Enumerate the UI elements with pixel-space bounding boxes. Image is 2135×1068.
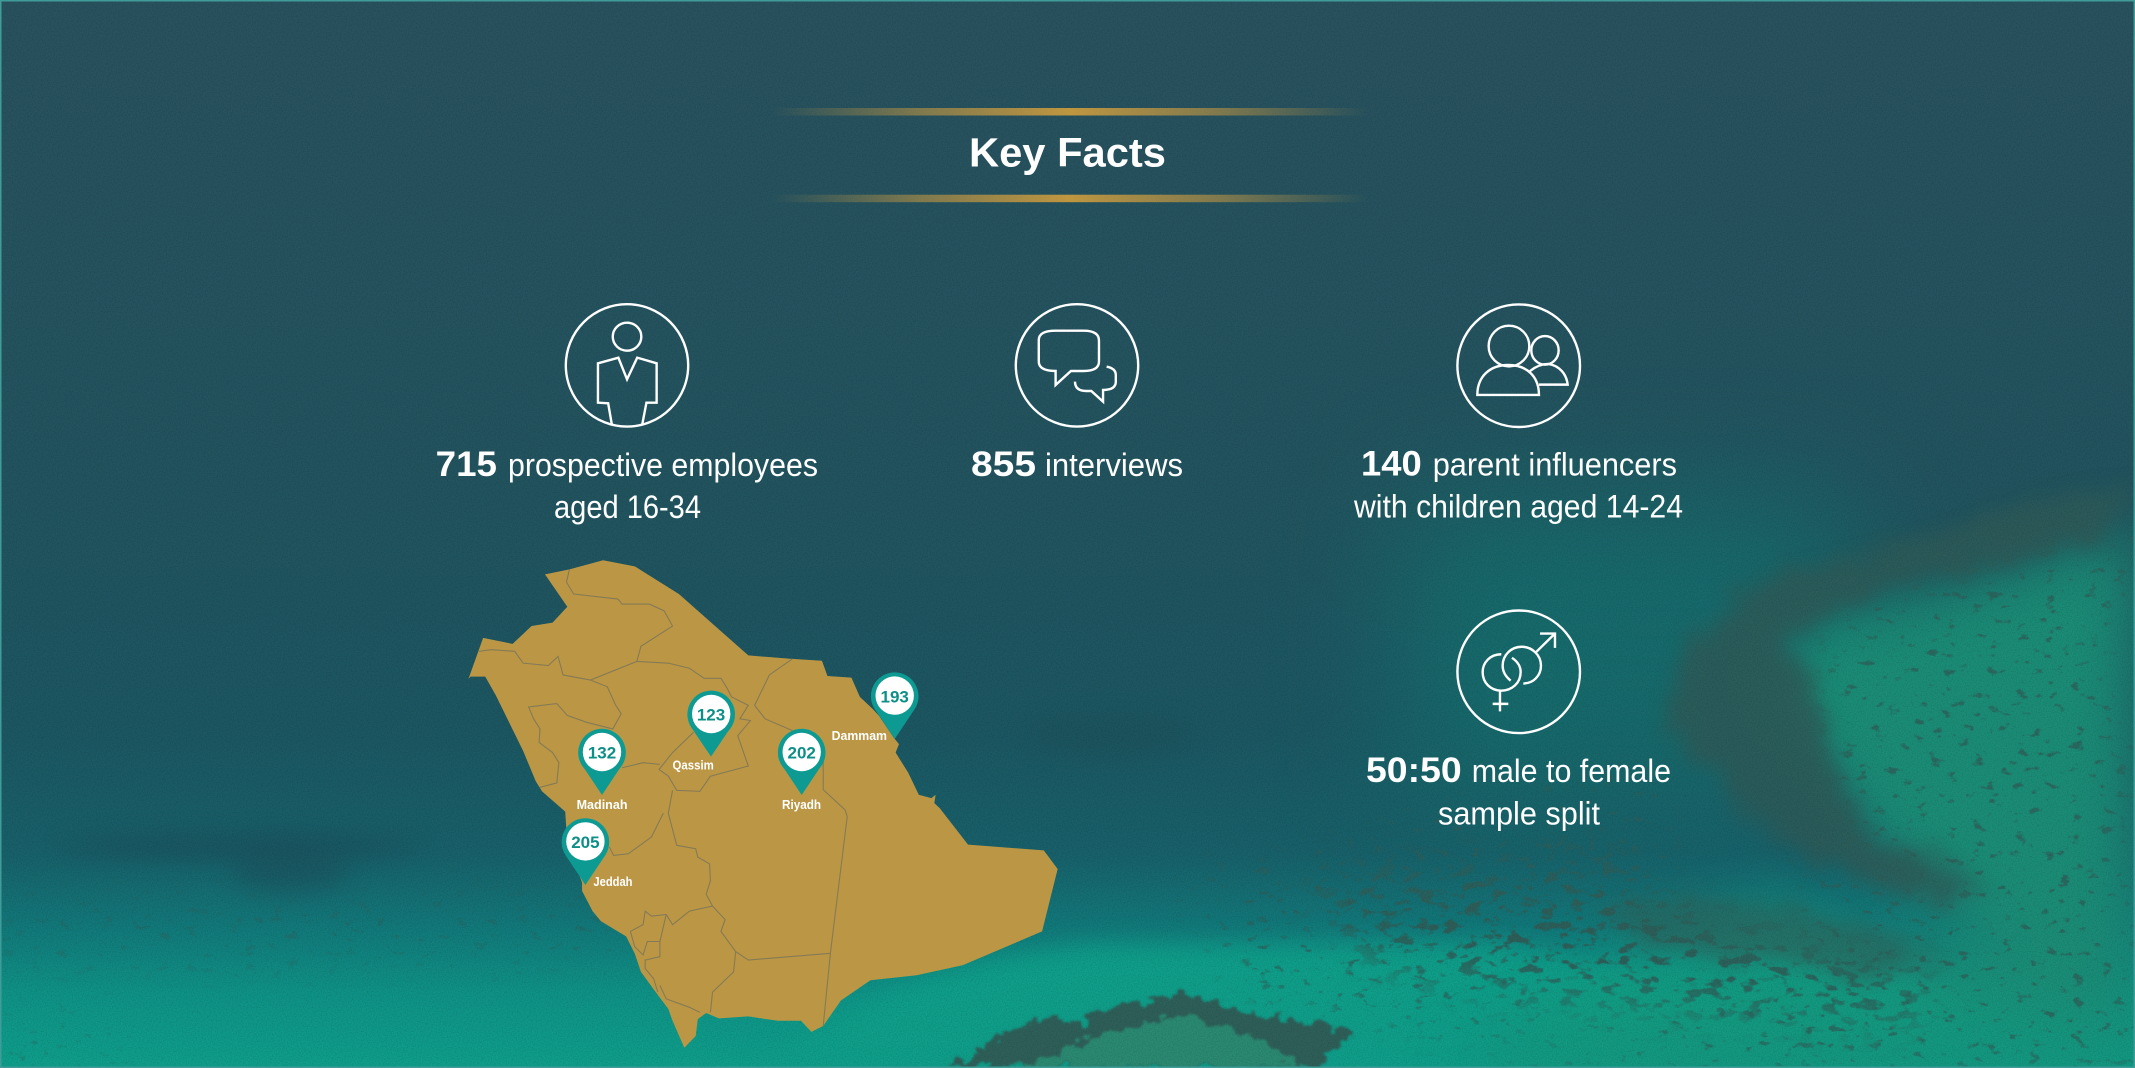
text: 715 prospective employees aged 16-34: 715 <box>436 445 497 484</box>
text: 140 parent influencers with children aged 14-24 <box>1353 445 1683 524</box>
pin: Qassim 123 <box>672 691 735 772</box>
pin: Madinah 132: Madinah <box>577 797 628 812</box>
map: country shape and regions <box>468 560 1058 1048</box>
fact: prospective employees <box>436 304 818 525</box>
pin: Jeddah 205: 205 <box>571 833 600 852</box>
pin: Dammam 193: 193 <box>881 687 909 706</box>
pin: Dammam 193 <box>832 672 918 743</box>
text: 140 parent influencers with children aged 14-24: parent influencers <box>1433 447 1677 483</box>
icon: two people <box>1457 304 1580 427</box>
fact: parent influencers <box>1353 304 1683 524</box>
icon: person <box>566 304 688 427</box>
pin: Qassim 123: Qassim <box>672 757 714 772</box>
map of Saudi Arabia <box>468 560 1058 1048</box>
icon: speech bubbles <box>1016 304 1138 427</box>
text: 50:50 male to female sample split: 50:50 <box>1366 751 1462 790</box>
fact: interviews <box>971 304 1183 484</box>
title block <box>772 108 1368 202</box>
icon: male and female symbols <box>1457 610 1580 733</box>
fact: gender split <box>1366 610 1671 832</box>
text: 715 prospective employees aged 16-34: aged 16-34 <box>554 489 701 525</box>
pin: Jeddah 205: Jeddah <box>593 874 633 889</box>
text: 140 parent influencers with children aged 14-24: 140 <box>1361 445 1422 484</box>
pin: Riyadh 202: 202 <box>788 744 816 763</box>
heading: Key Facts <box>969 130 1166 176</box>
text: 855 interviews <box>971 445 1183 484</box>
text: 855 interviews: interviews <box>1045 447 1183 483</box>
text: 140 parent influencers with children aged 14-24: with children aged 14-24 <box>1353 488 1683 524</box>
text: 715 prospective employees aged 16-34: prospective employees <box>508 447 818 483</box>
text: 50:50 male to female sample split <box>1366 751 1671 832</box>
pin: Jeddah 205 <box>562 818 633 889</box>
text: 50:50 male to female sample split: sample split <box>1438 796 1600 832</box>
pin: Riyadh 202 <box>778 729 826 812</box>
pin: Riyadh 202: Riyadh <box>782 797 821 812</box>
pin: Qassim 123: 123 <box>697 706 725 724</box>
text: 715 prospective employees aged 16-34 <box>436 445 818 525</box>
text: 50:50 male to female sample split: male to female <box>1472 753 1671 789</box>
text: 855 interviews: 855 <box>971 445 1036 484</box>
pin: Madinah 132: 132 <box>588 744 616 763</box>
pin: Dammam 193: Dammam <box>832 728 887 743</box>
pin: Madinah 132 <box>577 729 628 812</box>
